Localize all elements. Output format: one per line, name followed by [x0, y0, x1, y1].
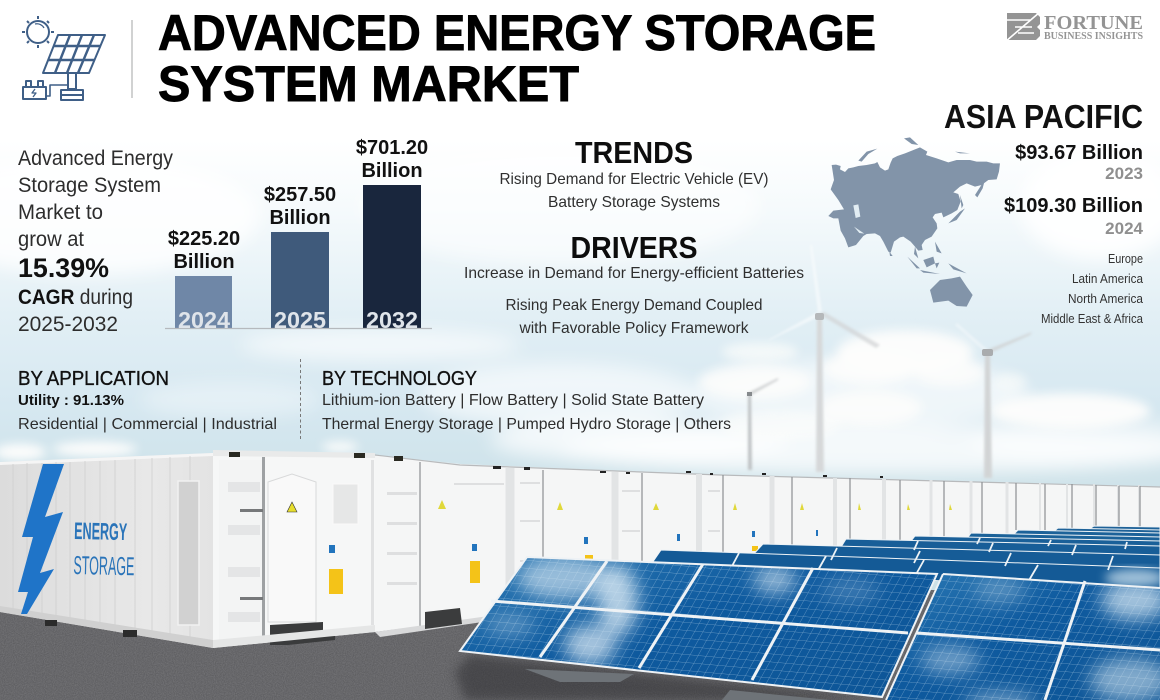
- bar chart: market size by year: 2025: [274, 307, 326, 333]
- title: ADVANCED ENERGY STORAGE: [158, 5, 876, 61]
- panel: trends and drivers: [464, 135, 804, 337]
- title: SYSTEM MARKET: [158, 56, 579, 112]
- bar chart: market size by year: $701.20: [356, 137, 428, 159]
- panel: regional market values: ASIA PACIFIC: [944, 98, 1143, 135]
- bar chart: market size by year: 2032: [366, 307, 418, 333]
- panel: regional market values: North America: [1068, 292, 1143, 306]
- container: front door face: [213, 450, 403, 648]
- wind turbines: [747, 245, 1032, 478]
- panel: by application: [18, 368, 277, 433]
- panel: regional market values: $109.30 Billion: [1004, 195, 1143, 217]
- Australia: [930, 277, 973, 307]
- panel: trends and drivers: Rising Peak Energy Demand Coupled: [506, 297, 762, 314]
- text block: CAGR summary: 15.39%: [18, 253, 109, 283]
- container label: ENERGY: [74, 518, 127, 546]
- bar chart: market size by year: $225.20: [168, 228, 240, 250]
- map: Asia Pacific: [828, 137, 1000, 307]
- panel: trends and drivers: with Favorable Policy Framework: [519, 320, 749, 337]
- solar panel front array: right section: [880, 570, 1160, 700]
- gravel ground: [0, 590, 1160, 700]
- bar chart: market size by year: [165, 137, 432, 333]
- panel: trends and drivers: TRENDS: [575, 135, 693, 170]
- container: Energy Storage side wall: [0, 453, 213, 648]
- solar panel front array: left section: [450, 550, 950, 700]
- panel: trends and drivers: Increase in Demand for Energy-efficient Batteries: [464, 265, 804, 282]
- text block: CAGR summary: Market to: [18, 201, 103, 224]
- panel: regional market values: $93.67 Billion: [1015, 142, 1143, 164]
- panel: by application: Utility : 91.13%: [18, 392, 124, 409]
- logo: Fortune Business Insights: [1005, 12, 1143, 42]
- container row receding to the right: [375, 455, 1160, 637]
- panel: trends and drivers: DRIVERS: [570, 230, 698, 265]
- logo: Fortune Business Insights: BUSINESS INSIGHTS: [1044, 31, 1143, 42]
- panel: regional market values: Europe: [1108, 252, 1143, 266]
- panel: by technology: BY TECHNOLOGY: [322, 368, 477, 390]
- bar chart: market size by year: Billion: [173, 251, 235, 273]
- text block: CAGR summary: 2025-2032: [18, 313, 118, 336]
- icon: solar panel with sun and battery: [22, 16, 105, 100]
- panel: regional market values: 2024: [1105, 219, 1144, 238]
- panel: regional market values: Latin America: [1072, 272, 1143, 286]
- header divider: [131, 20, 133, 98]
- bar chart: market size by year: Billion: [361, 160, 423, 182]
- panel: trends and drivers: Rising Demand for Electric Vehicle (EV): [500, 171, 768, 188]
- panel: regional market values: [944, 98, 1144, 326]
- panel: regional market values: Middle East & Africa: [1041, 312, 1143, 326]
- text block: CAGR summary: Advanced Energy: [18, 147, 173, 170]
- panel: by application: Residential | Commercial | Industrial: [18, 416, 277, 433]
- panel: by technology: Thermal Energy Storage | Pumped Hydro Storage | Others: [322, 416, 731, 433]
- title: [158, 5, 876, 112]
- bar chart: market size by year: $257.50: [264, 184, 336, 206]
- text block: CAGR summary: grow at: [18, 228, 84, 251]
- text block: CAGR summary: [18, 147, 173, 336]
- panel: by technology: Lithium-ion Battery | Flow Battery | Solid State Battery: [322, 392, 704, 409]
- bar chart: market size by year: 2024: [178, 307, 230, 333]
- panel: by application: BY APPLICATION: [18, 368, 169, 390]
- container label: [73, 518, 135, 581]
- panel: by technology: [322, 368, 731, 433]
- bar chart: market size by year: Billion: [269, 207, 331, 229]
- rear solar panel rows: [650, 526, 1160, 592]
- logo: Fortune Business Insights: FORTUNE: [1044, 12, 1143, 34]
- text block: CAGR summary: Storage System: [18, 174, 161, 197]
- container: Energy Storage side wall: STORAGE: [73, 550, 135, 581]
- panel: regional market values: 2023: [1105, 164, 1143, 183]
- text block: CAGR summary: CAGR during: [18, 286, 133, 309]
- panel: trends and drivers: Battery Storage Systems: [548, 194, 720, 211]
